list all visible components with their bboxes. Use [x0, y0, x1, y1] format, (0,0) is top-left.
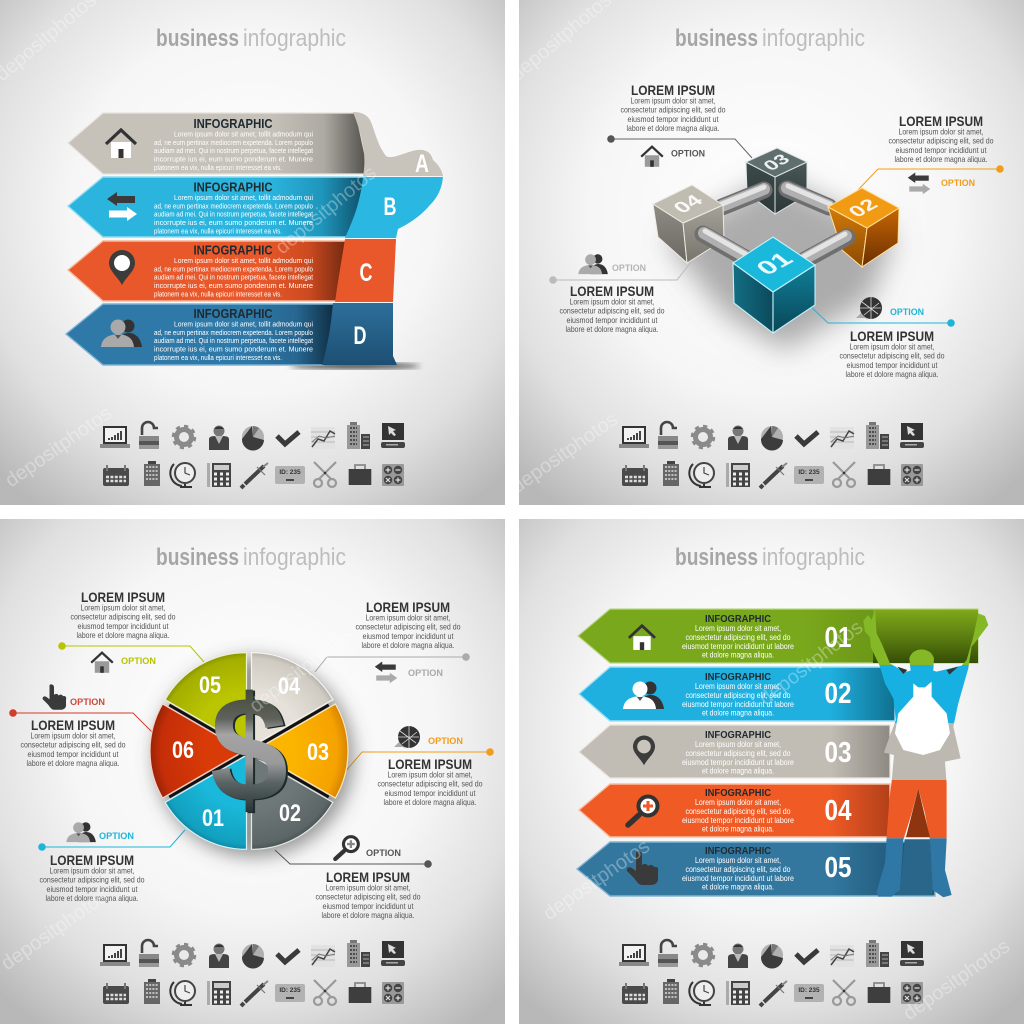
- row text 02: eiusmod tempor incididunt ut labore: [682, 700, 794, 709]
- title: infographic: [762, 25, 865, 52]
- panel: bottom-left dollar wheel infographic: [0, 519, 505, 1024]
- cube 01: [733, 237, 815, 333]
- text block B: audiam ad mei. Qui in nostrum perpetua, facete intellegat: [154, 209, 314, 218]
- row text 04: et dolore magna aliqua.: [702, 824, 774, 834]
- icon: planet head: [856, 297, 882, 320]
- tube 03 to 02: [787, 186, 830, 207]
- title: infographic: [762, 544, 865, 571]
- cube 01: 01: [750, 248, 799, 279]
- text block 03: eiusmod tempor incididunt ut: [384, 788, 476, 798]
- row numbers: [824, 622, 852, 884]
- text block A: ad, ne eum pertinax mediocrem expetenda. Lorem populo: [154, 138, 313, 147]
- text block 04: [560, 283, 665, 334]
- title: infographic: [243, 544, 346, 571]
- dollar sign: $: [212, 666, 290, 834]
- text block 01: labore et dolore magna aliqua.: [846, 369, 938, 379]
- text block 03: consectetur adipiscing elit, sed do: [620, 105, 726, 115]
- row text 01: et dolore magna aliqua.: [702, 650, 774, 660]
- row text 01: eiusmod tempor incididunt ut labore: [682, 642, 794, 651]
- text block 03: [378, 756, 483, 807]
- hand section A: [353, 112, 443, 176]
- text block 01: Lorem ipsum dolor sit amet,: [850, 342, 934, 352]
- text block 01: [40, 852, 145, 903]
- text block C: platonem ea vix, nulla epicuri interesset ea vis.: [154, 290, 282, 299]
- text block 04: consectetur adipiscing elit, sed do: [356, 622, 461, 632]
- ribbon 02: [579, 667, 895, 721]
- armpit shadows: [897, 667, 958, 675]
- row text 02: et dolore magna aliqua.: [702, 708, 774, 718]
- panel: top-left ribbon hand infographic: [0, 0, 505, 505]
- row text 04: eiusmod tempor incididunt ut labore: [682, 816, 794, 825]
- row text 05: INFOGRAPHIC: [705, 845, 771, 857]
- row numbers: 01: [824, 622, 852, 654]
- text block B: [154, 179, 314, 235]
- panel background: [519, 0, 1024, 505]
- ribbon 03: [579, 725, 890, 778]
- option label 03: OPTION: [428, 736, 463, 747]
- text block 05: labore et dolore magna aliqua.: [76, 630, 170, 640]
- text block 03: labore et dolore magna aliqua.: [384, 797, 476, 807]
- faint stock watermark text: depositphotos: [539, 835, 654, 925]
- text block A: incorrupte ius ei, eum sumo ponderum et. Munere: [154, 154, 313, 164]
- icon strip: [619, 940, 924, 1006]
- text block 04: Lorem ipsum dolor sit amet,: [366, 612, 450, 622]
- cube 03: 03: [759, 151, 795, 174]
- text block C: [154, 243, 314, 299]
- text block 02: labore et dolore magna aliqua.: [322, 910, 414, 920]
- hand letters: [354, 150, 429, 350]
- text block 06: consectetur adipiscing elit, sed do: [20, 740, 126, 750]
- text block C: Lorem ipsum dolor sit amet, tollit admodum qui: [174, 256, 313, 265]
- text block A: platonem ea vix, nulla epicuri interesset ea vis.: [154, 163, 282, 172]
- row text 02: INFOGRAPHIC: [705, 671, 771, 683]
- text block 01: LOREM IPSUM: [850, 328, 934, 344]
- text block 04: [356, 599, 461, 650]
- text block 05: [70, 589, 176, 640]
- segment 02: [252, 755, 333, 849]
- text block 05: Lorem ipsum dolor sit amet,: [80, 602, 166, 612]
- text block B: Lorem ipsum dolor sit amet, tollit admodum qui: [174, 193, 313, 202]
- row text 02: Lorem ipsum dolor sit amet,: [695, 682, 781, 691]
- segment 05: [165, 653, 246, 747]
- text block A: Lorem ipsum dolor sit amet, tollit admodum qui: [174, 130, 313, 138]
- segment numbers: 04: [278, 673, 301, 700]
- hand section C: [335, 239, 396, 302]
- title: business: [156, 544, 239, 571]
- ribbon C: [68, 241, 347, 301]
- hand section B: [345, 177, 443, 238]
- figure silhouette: [864, 610, 988, 898]
- icon: house: [106, 130, 136, 158]
- icon: people: [66, 822, 96, 842]
- text block D: incorrupte ius ei, eum sumo ponderum et. Munere: [154, 344, 313, 354]
- row text 05: consectetur adipiscing elit, sed do: [686, 865, 791, 874]
- row text 05: et dolore magna aliqua.: [702, 882, 774, 892]
- text block 06: Lorem ipsum dolor sit amet,: [30, 730, 116, 740]
- hand letters: A: [415, 150, 429, 178]
- text block 03: eiusmod tempor incididunt ut: [628, 114, 719, 124]
- title: [156, 25, 346, 52]
- text block 03: labore et dolore magna aliqua.: [626, 123, 720, 133]
- text block D: ad, ne eum pertinax mediocrem expetenda. Lorem populo: [154, 328, 313, 337]
- tube 04 to 01: [703, 231, 747, 258]
- text block 04: Lorem ipsum dolor sit amet,: [570, 296, 654, 306]
- text block 02: LOREM IPSUM: [899, 113, 983, 129]
- row text 05: [682, 845, 794, 892]
- text block 05: eiusmod tempor incididunt ut: [78, 621, 169, 631]
- hand shadow: [290, 364, 420, 368]
- option label 05: OPTION: [121, 656, 156, 667]
- icon strip: [619, 422, 924, 488]
- segment numbers: 02: [279, 800, 301, 827]
- row text 03: INFOGRAPHIC: [705, 729, 771, 741]
- title: [675, 544, 865, 571]
- text block 06: eiusmod tempor incididunt ut: [28, 749, 119, 759]
- text block D: audiam ad mei. Qui in nostrum perpetua, facete intellegat: [154, 336, 314, 345]
- dollar wheel: [150, 653, 354, 857]
- text block 05: LOREM IPSUM: [81, 589, 165, 605]
- icon: house: [641, 147, 663, 167]
- faint stock watermark text: depositphotos: [271, 162, 381, 259]
- connector lines: [9, 642, 494, 868]
- row text 01: [682, 613, 794, 660]
- segment numbers: 03: [307, 739, 329, 766]
- text block D: INFOGRAPHIC: [194, 306, 273, 321]
- text block 01: labore et dolore magna aliqua.: [46, 893, 138, 903]
- text block 02: [888, 113, 994, 164]
- text block 06: labore et dolore magna aliqua.: [26, 758, 120, 768]
- row numbers: 02: [824, 678, 852, 710]
- option label 06: OPTION: [70, 697, 105, 708]
- cube 04: [653, 185, 724, 263]
- segment 04: [252, 653, 333, 747]
- text block C: INFOGRAPHIC: [194, 243, 273, 258]
- text block 03: consectetur adipiscing elit, sed do: [378, 779, 483, 789]
- row text 03: et dolore magna aliqua.: [702, 766, 774, 776]
- row text 01: Lorem ipsum dolor sit amet,: [695, 624, 781, 633]
- icon: arrows: [107, 192, 137, 221]
- text block 01: consectetur adipiscing elit, sed do: [840, 351, 945, 361]
- row numbers: 03: [824, 737, 852, 769]
- icon: house: [91, 653, 113, 673]
- icon: people: [578, 254, 608, 274]
- dark panel between arms: [873, 610, 978, 663]
- faint stock watermark text: depositphotos: [899, 935, 1014, 1024]
- row text 02: [682, 671, 794, 718]
- tube 01 to 02: [803, 234, 847, 260]
- text block B: incorrupte ius ei, eum sumo ponderum et. Munere: [154, 218, 313, 227]
- hand section D: [322, 303, 397, 365]
- text block A: [154, 116, 314, 172]
- gap between legs, orange: [906, 788, 930, 837]
- segment numbers: [172, 672, 329, 832]
- text block B: ad, ne eum pertinax mediocrem expetenda. Lorem populo: [154, 201, 313, 210]
- icon: magnifier: [335, 837, 358, 859]
- row text 04: consectetur adipiscing elit, sed do: [686, 807, 791, 816]
- option label 02: OPTION: [941, 178, 975, 189]
- hand letters: C: [360, 259, 372, 287]
- title: business: [675, 544, 758, 571]
- text block 01: LOREM IPSUM: [50, 852, 134, 868]
- cube 02: [828, 188, 899, 267]
- ribbon 01: [578, 609, 978, 663]
- icon strip: [100, 940, 405, 1006]
- faint stock watermark text: depositphotos: [507, 408, 622, 498]
- text block 05: consectetur adipiscing elit, sed do: [70, 612, 176, 622]
- ribbon 05: [577, 842, 935, 896]
- text block 03: Lorem ipsum dolor sit amet,: [630, 96, 716, 106]
- dollar sign: $: [210, 665, 288, 833]
- icon: hand: [43, 684, 66, 710]
- row text 04: [682, 787, 794, 834]
- panel background: [519, 519, 1024, 1024]
- text block 02: LOREM IPSUM: [326, 869, 410, 885]
- panel background: [0, 0, 505, 505]
- panel background: [0, 519, 505, 1024]
- hand letters: D: [354, 322, 366, 350]
- faint stock watermark text: depositphotos: [0, 885, 112, 975]
- text block C: ad, ne eum pertinax mediocrem expetenda. Lorem populo: [154, 265, 313, 274]
- icon: house: [629, 626, 655, 650]
- option label 02: OPTION: [366, 848, 401, 859]
- text block 03: LOREM IPSUM: [388, 756, 472, 772]
- text block 04: LOREM IPSUM: [570, 283, 654, 299]
- text block 03: [620, 82, 726, 133]
- segment 03: [254, 704, 348, 798]
- white torso: [895, 682, 950, 755]
- text block 06: LOREM IPSUM: [31, 717, 115, 733]
- row numbers: 04: [824, 795, 852, 827]
- cube diagram shadow: [665, 175, 895, 350]
- text block 02: consectetur adipiscing elit, sed do: [888, 136, 994, 146]
- text block 02: eiusmod tempor incididunt ut: [896, 145, 987, 155]
- icon: map pin: [633, 736, 655, 765]
- icon: people: [101, 320, 142, 347]
- faint stock watermark text: depositphotos: [1, 402, 116, 492]
- cube 04: 04: [669, 192, 708, 217]
- icon strip: [100, 422, 405, 488]
- text block 04: eiusmod tempor incididunt ut: [566, 315, 658, 325]
- tube 04 to 03: [722, 187, 764, 207]
- cube 02: 02: [844, 196, 883, 221]
- text block 04: eiusmod tempor incididunt ut: [362, 631, 454, 641]
- icon strip: ID: 235: [279, 987, 301, 994]
- icon: map pin: [109, 250, 135, 285]
- segment dark gaps: [169, 705, 329, 797]
- text block 03: Lorem ipsum dolor sit amet,: [388, 770, 472, 780]
- option label 01: OPTION: [99, 831, 134, 842]
- icon strip: ID: 235: [798, 469, 820, 476]
- icon: arrows: [908, 172, 930, 194]
- text block 06: [20, 717, 126, 768]
- text block A: audiam ad mei. Qui in nostrum perpetua, facete intellegat: [154, 146, 314, 155]
- text block 02: Lorem ipsum dolor sit amet,: [898, 126, 984, 136]
- title: infographic: [243, 25, 346, 52]
- connector lines: [549, 135, 1004, 327]
- option label 01: OPTION: [890, 307, 924, 318]
- icon: people: [623, 682, 664, 709]
- text block D: Lorem ipsum dolor sit amet, tollit admodum qui: [174, 320, 313, 328]
- segment numbers: 05: [199, 672, 221, 699]
- text block 02: eiusmod tempor incididunt ut: [322, 901, 414, 911]
- icon: arrows: [375, 662, 397, 683]
- text block 02: Lorem ipsum dolor sit amet,: [326, 882, 410, 892]
- cube 03: [746, 148, 807, 214]
- icon: planet head: [394, 726, 420, 749]
- option label 04: OPTION: [408, 668, 443, 679]
- ribbon D: [66, 304, 336, 365]
- row text 02: consectetur adipiscing elit, sed do: [686, 691, 791, 700]
- title: business: [675, 25, 758, 52]
- hand letters: B: [384, 193, 396, 221]
- row text 03: Lorem ipsum dolor sit amet,: [695, 740, 781, 749]
- text block C: audiam ad mei. Qui in nostrum perpetua, facete intellegat: [154, 273, 314, 282]
- text block 04: labore et dolore magna aliqua.: [566, 324, 658, 334]
- ribbon 04: [579, 784, 890, 837]
- row text 04: Lorem ipsum dolor sit amet,: [695, 798, 781, 807]
- title: [675, 25, 865, 52]
- row text 01: consectetur adipiscing elit, sed do: [686, 633, 791, 642]
- row text 01: INFOGRAPHIC: [705, 613, 771, 625]
- text block 01: eiusmod tempor incididunt ut: [46, 884, 138, 894]
- panel: bottom-right ribbon figure infographic: [519, 519, 1024, 1024]
- faint stock watermark text: depositphotos: [755, 616, 867, 710]
- row text 03: eiusmod tempor incididunt ut labore: [682, 758, 794, 767]
- segment numbers: 01: [202, 805, 224, 832]
- ribbon A: [68, 113, 369, 174]
- text block 01: Lorem ipsum dolor sit amet,: [50, 866, 134, 876]
- ribbon B: [68, 177, 366, 237]
- text block 01: [840, 328, 945, 379]
- icon: hand: [627, 851, 658, 885]
- row text 04: INFOGRAPHIC: [705, 787, 771, 799]
- row text 05: eiusmod tempor incididunt ut labore: [682, 874, 794, 883]
- text block 02: [316, 869, 421, 920]
- row text 03: [682, 729, 794, 776]
- colour bands of figure: [864, 610, 988, 898]
- text block 04: labore et dolore magna aliqua.: [362, 640, 454, 650]
- title: business: [156, 25, 239, 52]
- text block B: platonem ea vix, nulla epicuri interesset ea vis.: [154, 226, 282, 235]
- option label 03: OPTION: [671, 148, 705, 160]
- row text 05: Lorem ipsum dolor sit amet,: [695, 856, 781, 865]
- segment numbers: 06: [172, 737, 194, 764]
- text block 04: consectetur adipiscing elit, sed do: [560, 306, 665, 316]
- option label 04: OPTION: [612, 263, 646, 274]
- row text 03: consectetur adipiscing elit, sed do: [686, 749, 791, 758]
- segment 06: [150, 704, 244, 798]
- text block B: INFOGRAPHIC: [194, 179, 273, 194]
- text block 03: LOREM IPSUM: [631, 82, 715, 98]
- icon strip: ID: 235: [798, 987, 820, 994]
- text block 01: consectetur adipiscing elit, sed do: [40, 875, 145, 885]
- text block 04: LOREM IPSUM: [366, 599, 450, 615]
- gap between legs, blue: [895, 839, 933, 895]
- text block 01: eiusmod tempor incididunt ut: [846, 360, 938, 370]
- text block 02: labore et dolore magna aliqua.: [894, 154, 988, 164]
- panel: top-right cube infographic: [519, 0, 1024, 505]
- text block D: platonem ea vix, nulla epicuri interesset ea vis.: [154, 353, 282, 362]
- icon: magnifier: [628, 796, 658, 825]
- text block C: incorrupte ius ei, eum sumo ponderum et. Munere: [154, 281, 313, 290]
- text block 02: consectetur adipiscing elit, sed do: [316, 892, 421, 902]
- text block A: INFOGRAPHIC: [194, 116, 273, 131]
- row numbers: 05: [824, 852, 852, 884]
- segment 01: [165, 755, 246, 849]
- faint stock watermark text: depositphotos: [245, 623, 357, 717]
- wheel shadow: [154, 657, 354, 857]
- title: [156, 544, 346, 571]
- text block D: [154, 306, 314, 362]
- icon strip: ID: 235: [279, 469, 301, 476]
